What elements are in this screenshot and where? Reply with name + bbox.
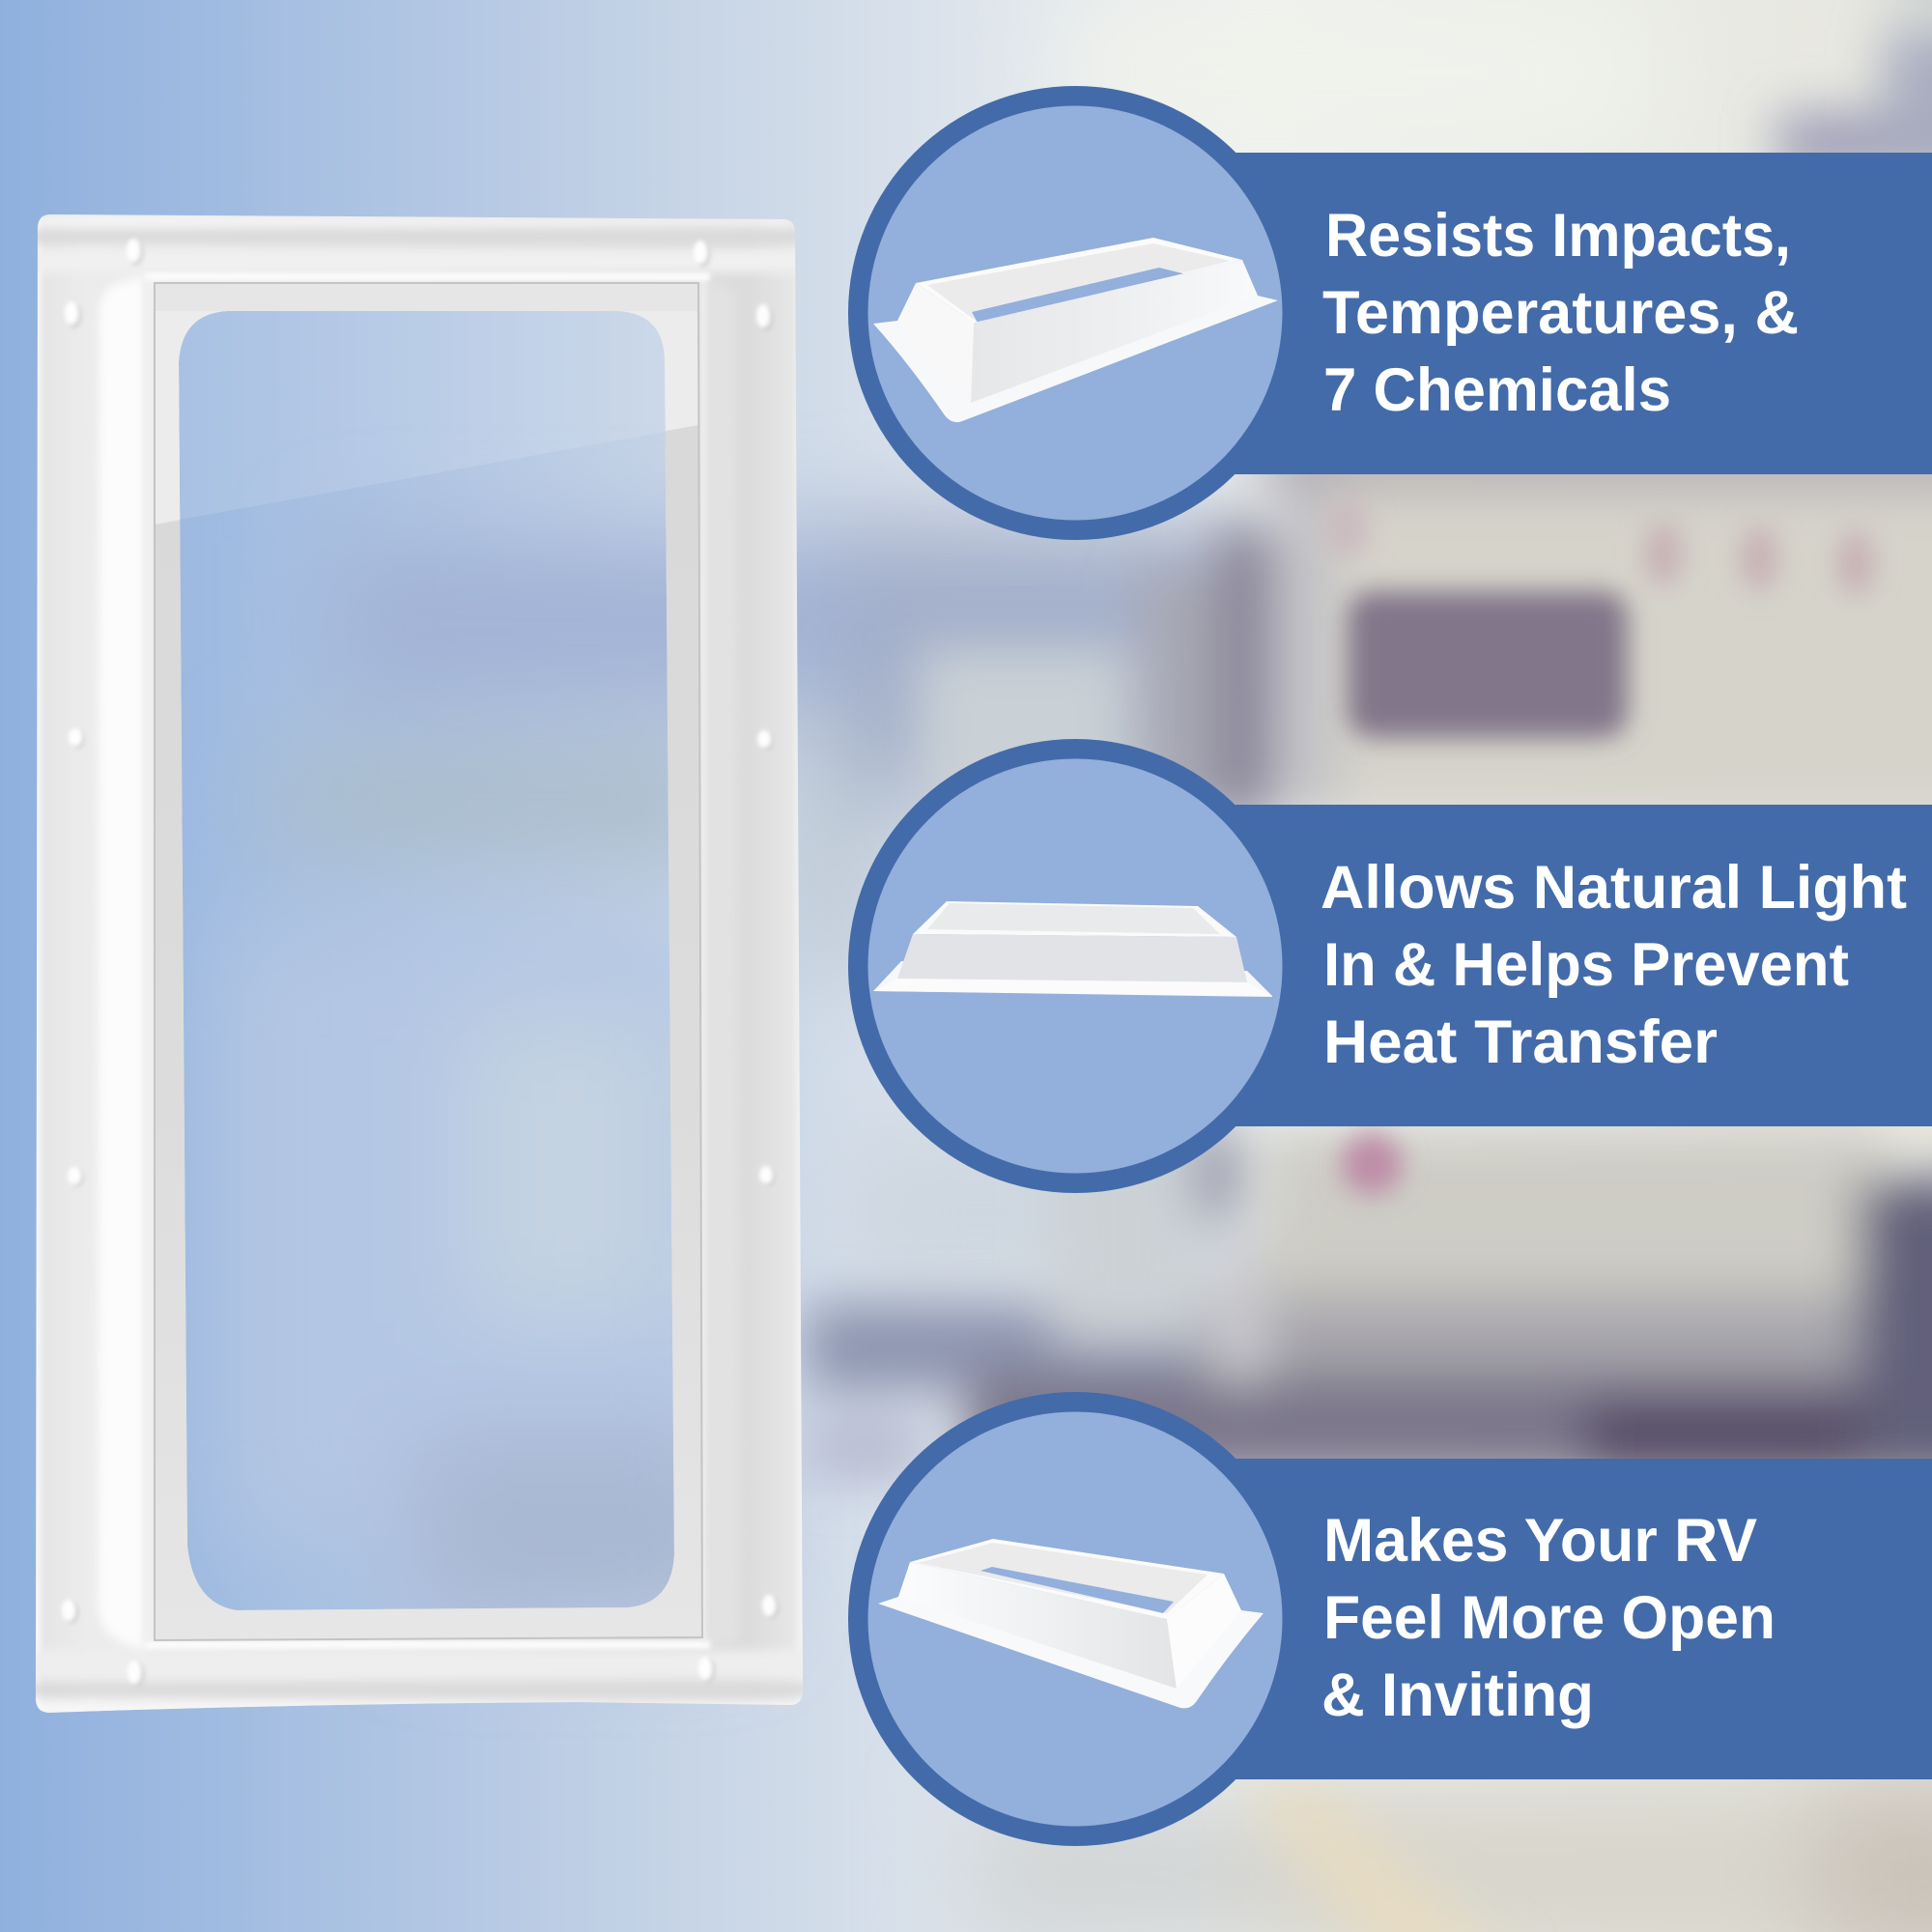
callout 1 text: Temperatures, & [1322,279,1799,347]
callout 1 band and ring [848,86,1932,540]
callout 3 text [1321,1507,1776,1729]
callout 3: open and inviting [848,1392,1932,1846]
callout 3 circle [867,1412,1283,1826]
callout 1: resists impacts [848,86,1932,540]
glass glare [179,311,665,520]
main product: window frame [29,208,811,1719]
callout 3 band and ring [848,1392,1932,1846]
icon: angled garnish view reversed [878,1539,1264,1708]
callout 2 text: In & Helps Prevent [1323,931,1849,999]
callout 3 text: & Inviting [1321,1662,1594,1729]
callout 2 band and ring [848,739,1932,1193]
icon: angled garnish view [873,238,1278,422]
callout 1 text: 7 Chemicals [1323,356,1671,424]
callout 2 circle [867,759,1283,1173]
icon: front garnish view [873,901,1272,997]
mounting screw dimples [62,239,780,1687]
callout 2 text [1321,854,1907,1076]
callout 3 text: Makes Your RV [1323,1507,1757,1575]
callout 3 text: Feel More Open [1323,1584,1776,1652]
inner panel around opening [156,440,699,1639]
callout 2 text: Allows Natural Light [1321,854,1907,922]
callout 1 circle [867,106,1283,520]
callout 2 text: Heat Transfer [1323,1009,1718,1076]
callout 2: natural light [848,739,1932,1193]
callout 1 text: Resists Impacts, [1325,202,1791,270]
callout 1 text [1322,202,1799,424]
